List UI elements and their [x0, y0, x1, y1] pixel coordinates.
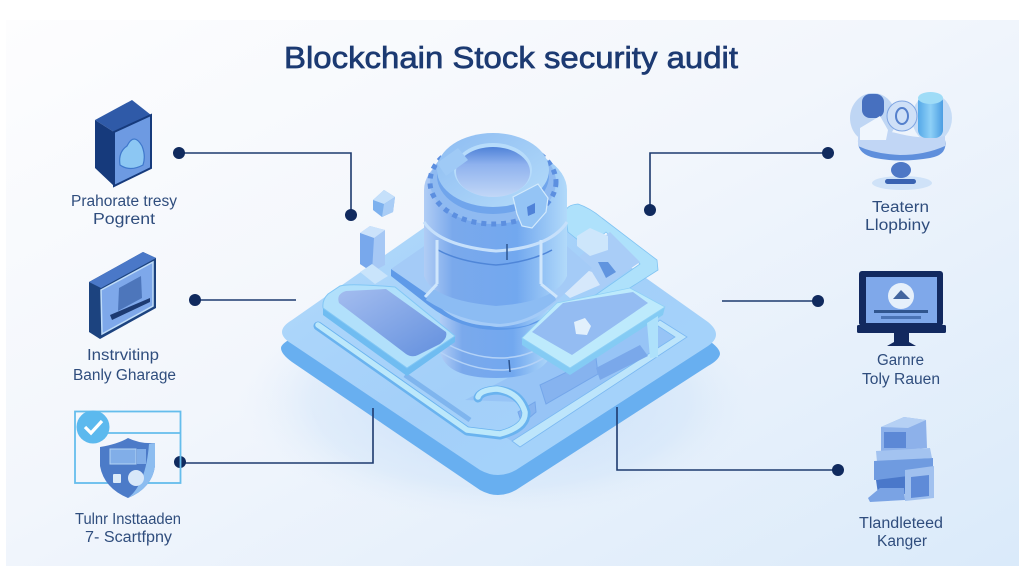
icon: box with bag: [95, 100, 151, 186]
back tray bracket: [552, 204, 658, 307]
label: top right: Llopbiny: [865, 217, 930, 234]
inner circuit area: [465, 310, 686, 446]
icon: stack of books: [868, 417, 934, 502]
connector: top right: [644, 147, 834, 216]
label: middle right: Toly Rauen: [862, 371, 940, 388]
icon: cloud storage dish: [850, 92, 952, 190]
icon: checked shield: [75, 410, 180, 498]
label: bottom right: Tlandleteed: [859, 515, 943, 532]
gear teeth: [430, 140, 556, 224]
platform shadow: [238, 278, 762, 522]
icon: tablet: [89, 252, 156, 339]
label: bottom left: 7- Scartfpny: [85, 529, 172, 546]
lower trace: [405, 375, 470, 420]
connector: top left: [173, 147, 357, 221]
main cylinder: [424, 146, 567, 306]
label: bottom right: [859, 515, 943, 550]
floating server block: [360, 226, 388, 284]
bottom trace with hook: [318, 325, 526, 435]
label: middle right: [862, 352, 940, 388]
label: top right: Teatern: [872, 199, 929, 216]
floating cube: [373, 190, 395, 217]
icon: monitor: [857, 271, 946, 346]
connector: middle right: [722, 295, 824, 307]
label: bottom right: Kanger: [877, 533, 927, 550]
label: top right: [865, 199, 930, 234]
top ring: [437, 133, 549, 214]
label: middle right: Garnre: [877, 352, 924, 369]
outer rail: [512, 320, 687, 447]
left glass panel: [323, 285, 455, 376]
lower cylinder: [440, 310, 552, 378]
label: bottom left: [75, 511, 181, 546]
ring clamp: [437, 148, 548, 228]
label: top left: Pogrent: [93, 211, 156, 228]
label: bottom left: Tulnr Insttaaden: [75, 511, 181, 528]
platform top surface: [282, 182, 716, 475]
label: top left: Prahorate tresy: [71, 193, 177, 210]
label: middle left: Instrvitinp: [87, 347, 159, 364]
right deck panel: [522, 288, 665, 375]
central isometric platform: [238, 133, 762, 522]
title: Blockchain Stock security audit: [284, 40, 738, 75]
label: middle left: [73, 347, 176, 384]
platform base edge: [281, 200, 720, 495]
connector: bottom left: [174, 408, 373, 468]
label: top left: [71, 193, 177, 228]
circuit blocks: [518, 358, 598, 424]
middle housing: [391, 240, 592, 330]
connector: bottom right: [617, 407, 844, 476]
connector: middle left: [189, 294, 296, 306]
label: middle left: Banly Gharage: [73, 367, 176, 384]
